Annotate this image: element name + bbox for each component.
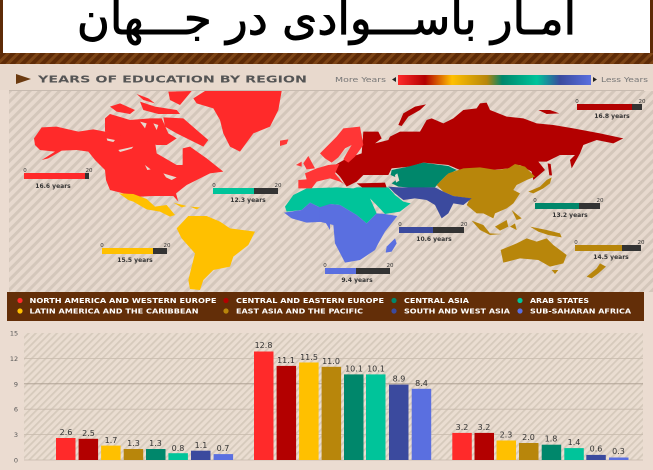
bar group 1 values: 2.5 (82, 429, 95, 438)
bar group 2 values (255, 341, 428, 388)
region: Madagascar (386, 238, 397, 253)
scale bar: Central and Eastern Europe 16.8 years: 16.8 years (594, 113, 630, 120)
bar group 3 values: 0.3 (612, 447, 625, 456)
bar group 1 values: 1.3 (149, 439, 162, 448)
bar group 1 values: 1.1 (195, 441, 207, 450)
bar group 3 values (456, 423, 625, 456)
scale bar: Arab States 12.3 years: 12.3 years (230, 197, 266, 204)
scale bar: South and West Asia 10.6 years: 0 (398, 222, 402, 228)
colour scale legend: More Years (335, 76, 386, 84)
bar group 3 values: 0.6 (590, 444, 602, 454)
scale bar: Central Asia 13.2 years: 13.2 years (552, 212, 588, 219)
scale bar: Central Asia 13.2 years (533, 198, 604, 219)
bar group 2 values: 10.1 (367, 364, 385, 374)
scale bar: East Asia 14.5 years: 14.5 years (593, 254, 629, 261)
scale bar: South and West Asia 10.6 years (398, 222, 468, 243)
scale bar: East Asia 14.5 years: 0 (574, 240, 578, 246)
map background (9, 91, 653, 292)
region: Greenland (193, 91, 282, 152)
icon: header triangle (16, 74, 31, 84)
scale bar: Arab States 12.3 years: 0 (212, 183, 216, 189)
bar group 2 values: 11.1 (277, 356, 295, 365)
legend item: North America and Western Europe: NORTH AMERICA AND WESTERN EUROPE (30, 296, 216, 305)
region: South and West Asia (388, 187, 472, 218)
top frame (0, 0, 653, 64)
scale bar: North America 16.6 years: 0 (23, 168, 27, 174)
scale bar: Central and Eastern Europe 16.8 years: 0 (575, 99, 579, 105)
y axis labels (10, 330, 18, 464)
region: Western Europe (280, 127, 363, 188)
scale bar: Arab States 12.3 years: 20 (274, 183, 282, 189)
y axis labels: 0 (14, 456, 18, 464)
colour scale legend: Less Years (601, 76, 648, 84)
region: East Asia and the Pacific (437, 164, 606, 278)
bar group 1 (56, 438, 233, 460)
scale bar: Sub-Saharan Africa 9.4 years: 0 (323, 263, 327, 269)
scale bar: South and West Asia 10.6 years: 20 (460, 222, 468, 228)
bar group 3 values: 2.3 (500, 430, 512, 440)
bar group 3 (452, 433, 628, 460)
legend item: Latin America and the Caribbean: LATIN AMERICA AND THE CARIBBEAN (30, 306, 198, 316)
scale bar: Arab States 12.3 years (212, 183, 282, 204)
scale bar: Central Asia 13.2 years: 20 (596, 198, 604, 204)
region: Sub-Saharan Africa (319, 204, 397, 263)
colour scale legend (335, 75, 648, 85)
bar group 2 values: 8.4 (415, 379, 428, 388)
lakes and inlets (107, 122, 177, 180)
scale bar: Latin America 15.5 years: 15.5 years (117, 257, 153, 264)
y axis labels: 3 (14, 431, 18, 439)
legend item: South and West Asia: SOUTH AND WEST ASIA (404, 306, 510, 316)
scale bar: North America 16.6 years (23, 168, 93, 190)
region: Central Asia (391, 163, 457, 188)
region: North America (34, 91, 223, 202)
scale bar: Sub-Saharan Africa 9.4 years: 20 (386, 263, 394, 269)
legend item: East Asia and the Pacific: EAST ASIA AND THE PACIFIC (236, 306, 363, 316)
scale bar: East Asia 14.5 years (574, 240, 645, 261)
region: Sub-Saharan west (284, 203, 330, 230)
chart plot area (24, 333, 643, 460)
scale bar: North America 16.6 years: 16.6 years (35, 183, 71, 190)
bar group 2 values: 11.5 (300, 353, 318, 362)
region: Central and Eastern Europe (333, 103, 623, 188)
bar chart (10, 330, 643, 470)
region: Latin America (119, 193, 255, 290)
scale bar: East Asia 14.5 years: 20 (638, 240, 645, 246)
bar group 2 values: 8.9 (393, 374, 405, 384)
scale bar: Central Asia 13.2 years: 0 (533, 198, 537, 204)
bar group 2 (254, 352, 431, 460)
bar group 3 values: 3.2 (456, 423, 468, 432)
bar group 1 values: 1.7 (105, 436, 117, 445)
title (3, 0, 650, 53)
bar group 3 values: 1.8 (545, 434, 557, 444)
scale bar: South and West Asia 10.6 years: 10.6 years (416, 236, 452, 243)
legend item: Central and Eastern Europe: CENTRAL AND EASTERN EUROPE (236, 296, 384, 305)
bar group 1 values: 2.6 (60, 428, 72, 437)
bar group 1 values (60, 428, 229, 453)
legend item: Sub-Saharan Africa: SUB-SAHARAN AFRICA (530, 306, 631, 316)
bar group 2 values: 10.1 (345, 364, 363, 374)
scale bar: Central and Eastern Europe 16.8 years: 20 (638, 99, 646, 105)
bar group 1 values: 0.8 (172, 444, 184, 453)
scale bar: Latin America 15.5 years: 20 (164, 243, 171, 249)
scale bar: Central and Eastern Europe 16.8 years (575, 99, 646, 120)
region legend panel (7, 292, 644, 321)
heading: YEARS OF EDUCATION BY REGION (37, 74, 307, 86)
category labels clipped at bottom edge (277, 469, 576, 470)
y axis labels: 12 (10, 355, 18, 363)
scale bar: Sub-Saharan Africa 9.4 years: 9.4 years (341, 277, 373, 284)
region: Arab States west (285, 188, 330, 212)
scale bars (23, 99, 646, 284)
scale bar: North America 16.6 years: 20 (86, 168, 93, 174)
y axis labels: 6 (14, 406, 18, 414)
y axis labels: 15 (10, 330, 18, 338)
bar group 1 values: 1.3 (127, 439, 140, 448)
legend item: Arab States: ARAB STATES (530, 296, 589, 305)
scale bar: Latin America 15.5 years (100, 243, 171, 264)
bar group 3 values: 2.0 (522, 433, 535, 442)
seas (395, 173, 399, 183)
bar group 2 values: 11.0 (322, 357, 340, 366)
bar group 3 values: 1.4 (568, 438, 580, 447)
scale bar: Sub-Saharan Africa 9.4 years (323, 263, 394, 284)
y axis labels: 9 (14, 380, 18, 388)
bar group 1 values: 0.7 (217, 444, 229, 453)
scale bar: Latin America 15.5 years: 0 (100, 243, 104, 249)
world map: Americas and western side (119, 91, 330, 290)
bar group 2 values: 12.8 (255, 341, 272, 350)
bar group 3 values: 3.2 (478, 423, 490, 432)
header strip (0, 64, 653, 91)
region: Arab States (319, 187, 411, 223)
world map: Eurasia, Africa and Oceania (319, 103, 623, 278)
legend item: Central Asia: CENTRAL ASIA (404, 296, 469, 305)
